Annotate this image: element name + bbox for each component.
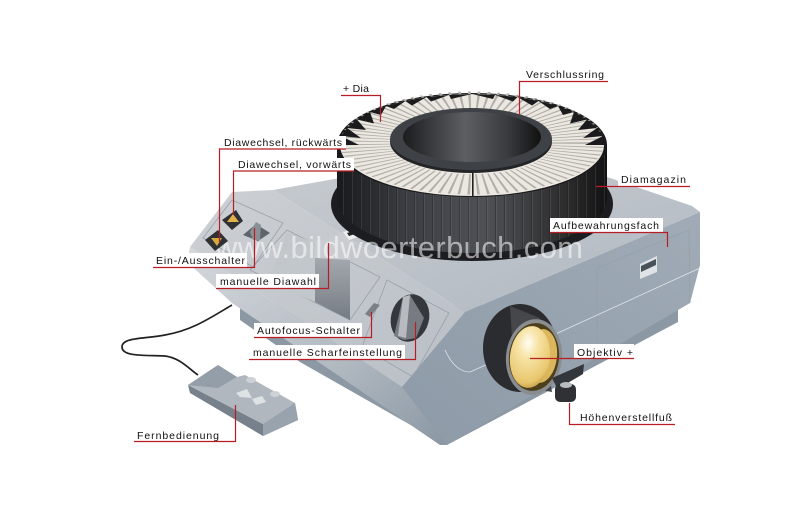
height adjusting foot xyxy=(552,364,584,402)
label: Diawechsel, rückwärts: Diawechsel, rückwärts xyxy=(224,137,342,149)
lens assembly xyxy=(483,304,566,398)
label: Autofocus-Schalter: Autofocus-Schalter xyxy=(257,325,360,337)
focus knob xyxy=(385,290,435,346)
remote control xyxy=(188,365,298,436)
magazine flange xyxy=(331,147,613,261)
top face xyxy=(273,177,700,312)
locking ring xyxy=(390,111,552,173)
label: Ein-/Ausschalter xyxy=(153,228,254,268)
label: Ein-/Ausschalter: Ein-/Ausschalter xyxy=(156,255,246,267)
magazine wall xyxy=(337,145,607,253)
label: Diamagazin xyxy=(596,173,690,186)
label: Diamagazin: Diamagazin xyxy=(621,174,686,186)
label: Diawechsel, vorwärts xyxy=(234,158,354,215)
top disc xyxy=(337,93,607,197)
label: Fernbedienung: Fernbedienung xyxy=(137,430,219,442)
cable xyxy=(122,305,232,375)
panel outlines xyxy=(203,200,700,377)
label: manuelle Diawahl xyxy=(216,243,328,288)
button: slide forward xyxy=(222,210,243,230)
label: + Dia xyxy=(341,83,380,122)
slides xyxy=(340,94,604,196)
label: Diawechsel, rückwärts xyxy=(220,136,346,242)
label: Objektiv + xyxy=(530,344,634,359)
label: Aufbewahrungsfach xyxy=(550,218,668,247)
label: Höhenverstellfuß xyxy=(570,403,675,424)
label: Diawechsel, vorwärts: Diawechsel, vorwärts xyxy=(238,159,351,171)
front right face xyxy=(402,212,700,445)
power switch xyxy=(243,222,270,241)
label: manuelle Diawahl: manuelle Diawahl xyxy=(220,276,316,288)
slide gap xyxy=(472,172,474,197)
label: Verschlussring: Verschlussring xyxy=(526,69,604,81)
slide holder slot xyxy=(268,228,361,320)
label: Objektiv +: Objektiv + xyxy=(577,347,633,359)
watermark: www.bildwoerterbuch.com xyxy=(214,230,583,265)
label: Aufbewahrungsfach: Aufbewahrungsfach xyxy=(553,220,659,232)
ring opening xyxy=(403,112,541,162)
base shadow foot xyxy=(240,305,678,445)
label: manuelle Scharfeinstellung xyxy=(249,322,416,360)
projector body xyxy=(187,177,700,445)
label: Autofocus-Schalter xyxy=(254,312,372,338)
label: Höhenverstellfuß: Höhenverstellfuß xyxy=(580,412,672,424)
label: manuelle Scharfeinstellung: manuelle Scharfeinstellung xyxy=(253,347,402,359)
back slide teeth xyxy=(339,94,605,145)
label: Verschlussring xyxy=(520,69,608,115)
autofocus switch xyxy=(365,303,380,317)
slide magazine xyxy=(331,93,613,261)
label: + Dia: + Dia xyxy=(343,83,369,95)
lower skirt xyxy=(187,247,447,445)
button: slide back xyxy=(205,230,228,251)
sloped control panel xyxy=(190,190,465,387)
label: Fernbedienung xyxy=(134,405,236,442)
side compartment slot xyxy=(640,256,657,279)
